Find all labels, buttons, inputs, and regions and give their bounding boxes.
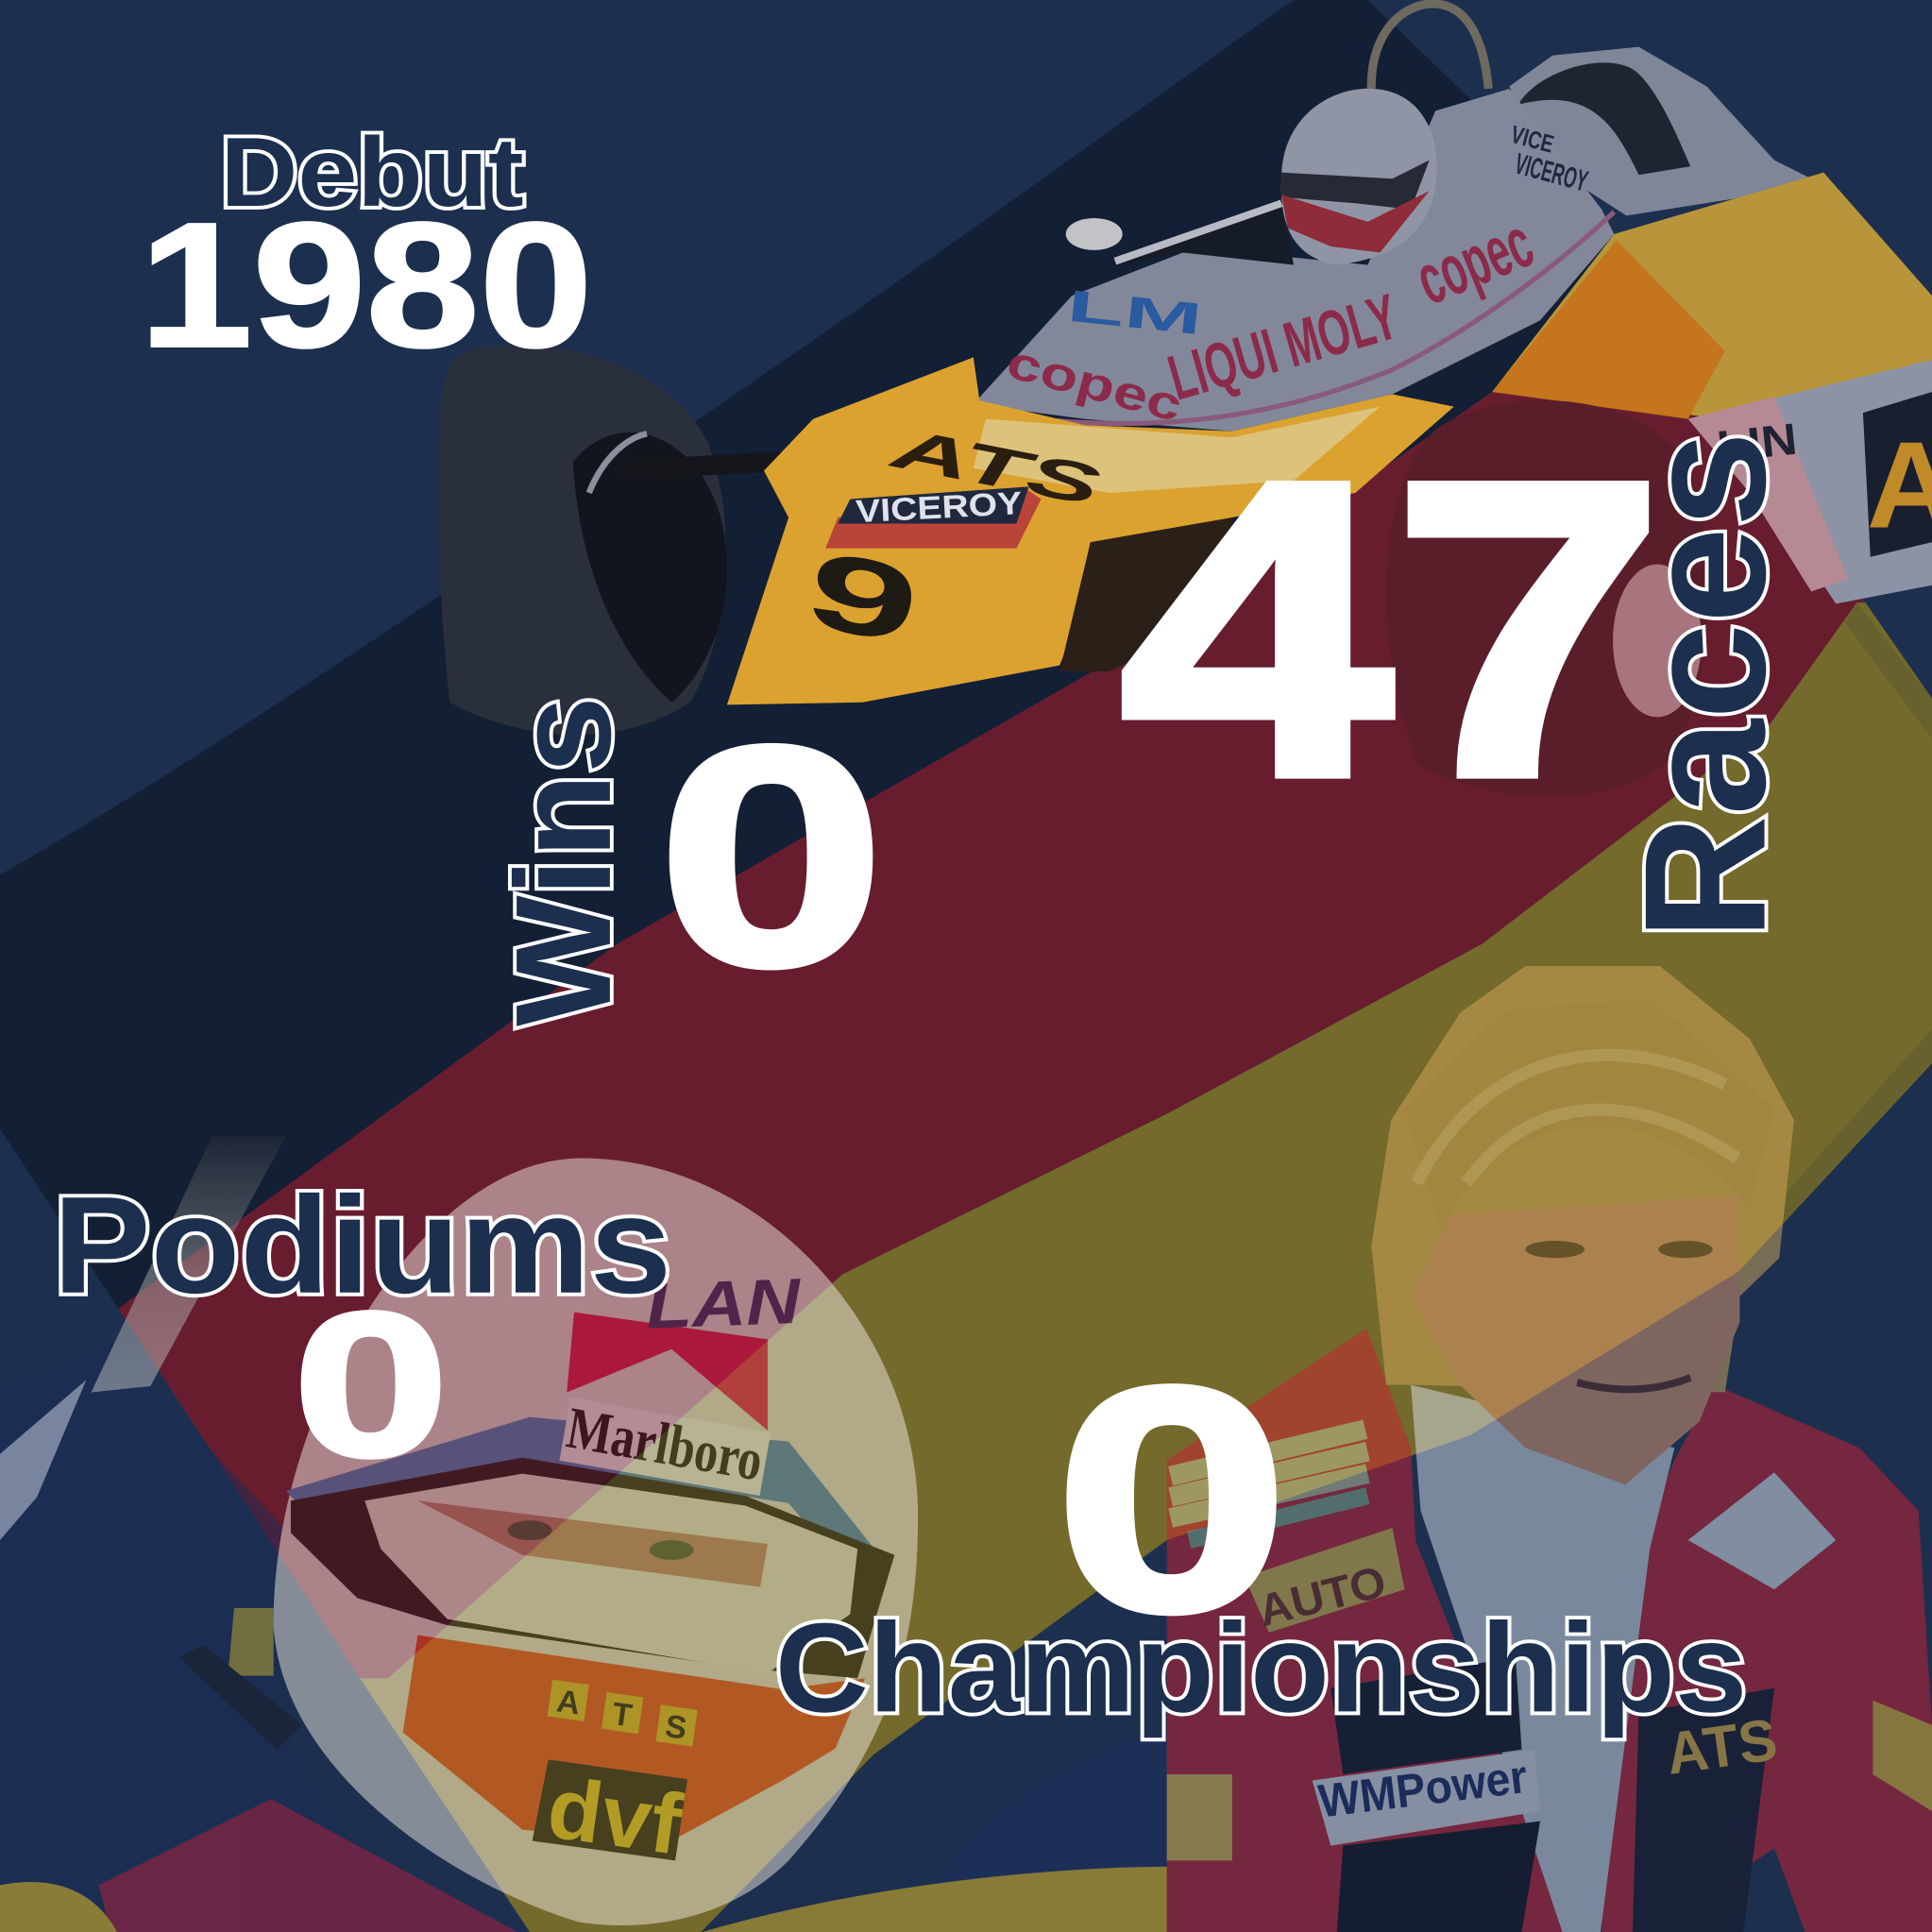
championships label: Championships bbox=[775, 1597, 1747, 1738]
under nose dark bbox=[1059, 517, 1232, 671]
debut year: 1980 bbox=[139, 186, 593, 384]
rear yellow bodywork bbox=[1492, 173, 1932, 419]
wins label: Wins bbox=[488, 696, 639, 1026]
helmet logos: S bbox=[663, 1708, 689, 1747]
championships value: 0 bbox=[1055, 1322, 1289, 1677]
helmet logos: A bbox=[554, 1683, 583, 1721]
debut label: Debut bbox=[221, 118, 524, 228]
engine cover bbox=[1509, 47, 1823, 215]
front tyre bbox=[438, 346, 726, 735]
yellow nose and chassis bbox=[727, 357, 1454, 704]
helmet logos: Marlboro bbox=[562, 1395, 768, 1494]
car livery text: LIQUI MOLY bbox=[1161, 281, 1406, 414]
side pod bbox=[1688, 360, 1932, 603]
car livery text: LM bbox=[1065, 280, 1205, 344]
car livery text: VICEROY bbox=[1512, 147, 1591, 198]
driver helmet bbox=[1281, 89, 1437, 265]
photo: driver in helmet bbox=[0, 1136, 1171, 1932]
photo: racing car bbox=[438, 4, 1932, 796]
suit logos: WMPower bbox=[1315, 1750, 1530, 1828]
podiums label: Podiums bbox=[53, 1168, 671, 1322]
car livery text bbox=[796, 120, 1591, 669]
helmet logos bbox=[533, 1266, 804, 1873]
car livery text: VICE bbox=[1508, 120, 1557, 159]
car livery text: VICEROY bbox=[855, 485, 1024, 530]
helmet logos: T bbox=[610, 1696, 635, 1734]
suit logos bbox=[1253, 1556, 1781, 1828]
suit logos: ATS bbox=[1662, 1706, 1781, 1788]
races label: Races bbox=[1609, 432, 1802, 941]
photo: driver portrait bbox=[1167, 966, 1932, 1932]
car livery text: copec bbox=[1405, 202, 1544, 320]
races value: 47 bbox=[1120, 395, 1665, 863]
white main body bbox=[974, 89, 1614, 432]
helmet logos: LAN bbox=[645, 1266, 804, 1343]
podiums value: 0 bbox=[294, 1270, 449, 1499]
rear tyre bbox=[1386, 400, 1708, 796]
suit logos: AUTO bbox=[1253, 1556, 1391, 1635]
car livery text: 9 bbox=[796, 527, 929, 669]
car livery text: ATS bbox=[884, 415, 1105, 517]
roll hoop bbox=[1371, 4, 1488, 89]
car livery text: copec bbox=[1002, 335, 1188, 432]
wins value: 0 bbox=[658, 682, 885, 1029]
helmet logos: dvf bbox=[542, 1759, 687, 1873]
photo: racing car: LIN bbox=[1715, 414, 1800, 471]
